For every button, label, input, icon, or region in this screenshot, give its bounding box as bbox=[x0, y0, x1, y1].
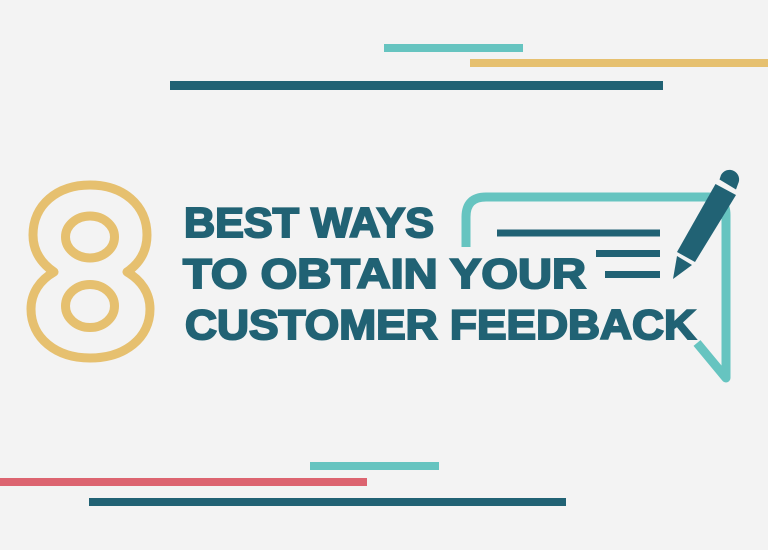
icon: text lines in bubble bbox=[497, 230, 660, 278]
title bbox=[183, 199, 696, 348]
bottom decorative bars bbox=[0, 462, 566, 506]
title: TO OBTAIN YOUR bbox=[183, 250, 586, 297]
title: BEST WAYS bbox=[184, 199, 434, 246]
icon: outlined number 8 bbox=[31, 185, 150, 358]
title: CUSTOMER FEEDBACK bbox=[185, 301, 696, 348]
icon: speech bubble outline bbox=[466, 197, 726, 378]
icon: pen bbox=[673, 170, 739, 279]
top decorative bars bbox=[170, 44, 768, 90]
